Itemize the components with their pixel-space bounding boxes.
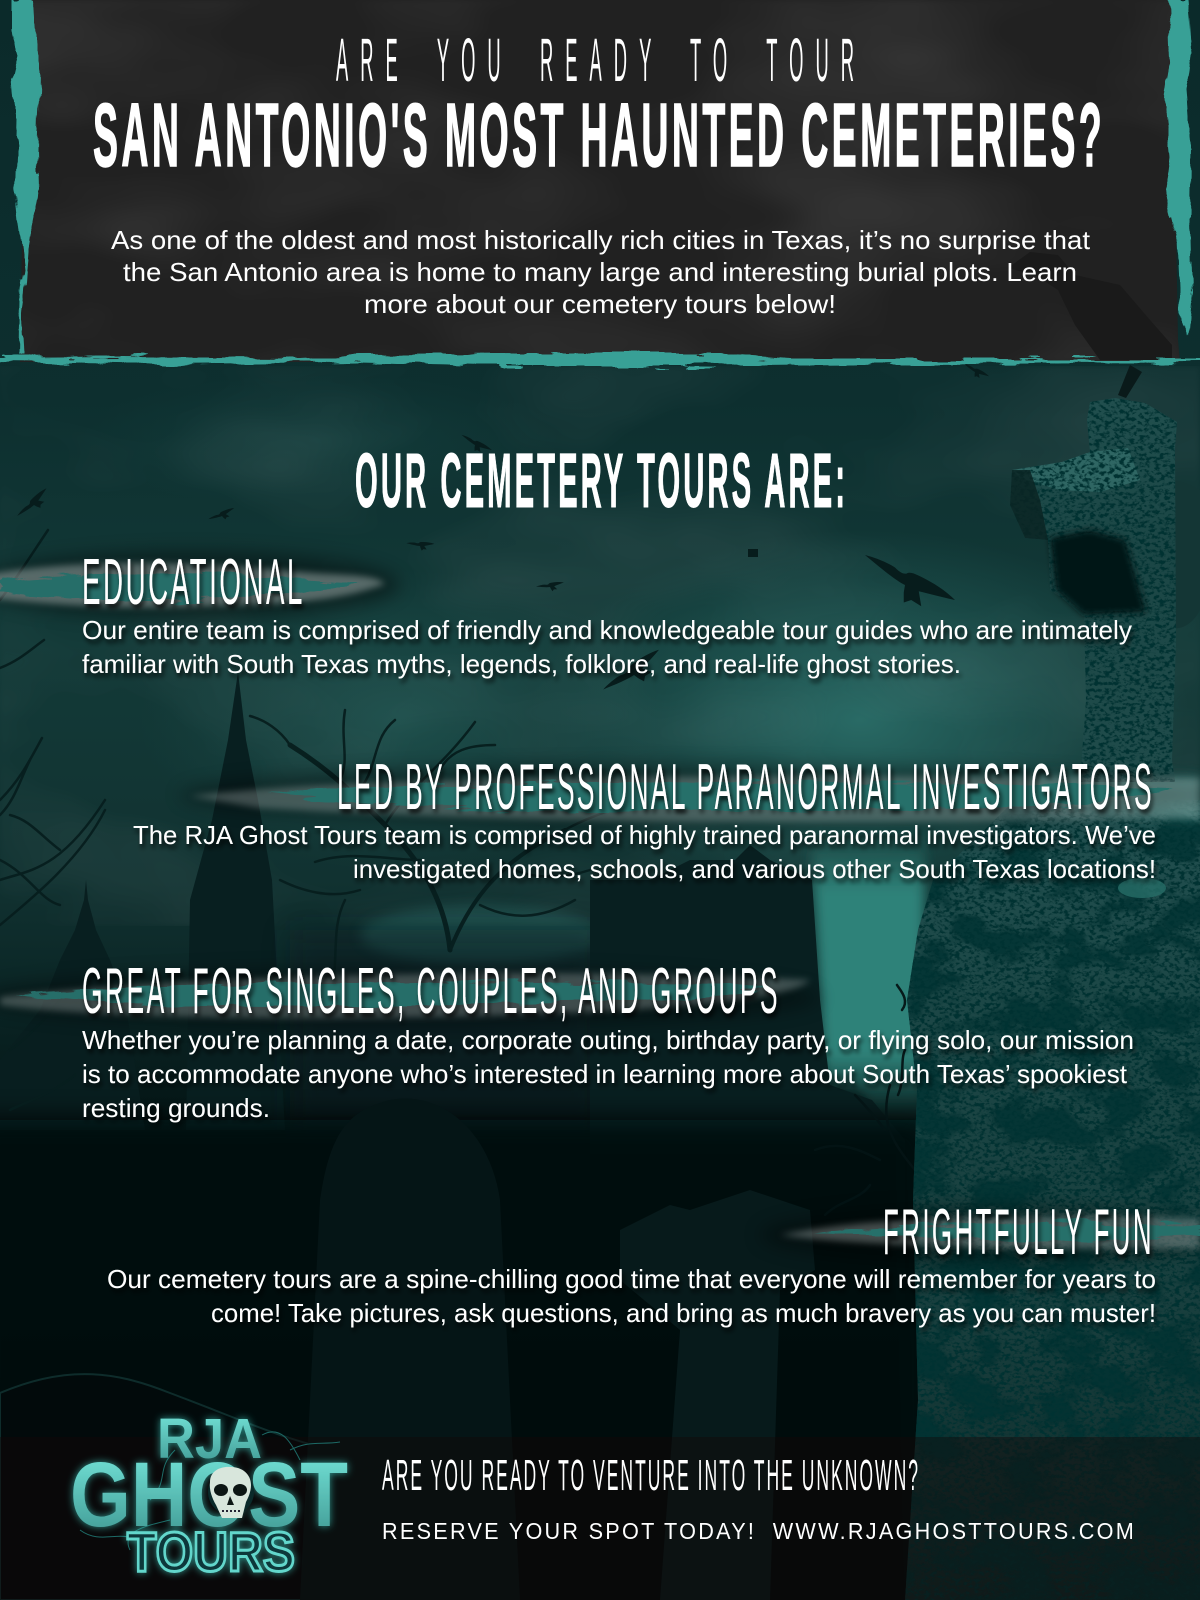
bare tree branches	[0, 530, 915, 1215]
teal brush edge left	[12, 0, 40, 352]
dark footer band	[0, 1437, 1200, 1600]
perched raven	[1008, 252, 1172, 360]
icon: skull	[208, 1467, 254, 1518]
foreground graves	[0, 1098, 815, 1600]
sky glow clouds	[0, 366, 1200, 926]
footer call to action	[382, 1451, 1136, 1544]
section: educational	[0, 545, 1132, 679]
cross arm shadow	[1050, 530, 1146, 615]
intro paragraph: the San Antonio area is home to many large and interesting burial plots. Learn	[123, 257, 1077, 287]
logo: RJA Ghost Tours: RJA	[157, 1407, 262, 1471]
educational body	[82, 615, 1132, 679]
section: great for singles, couples, and groups	[0, 954, 1134, 1123]
raven legs	[1118, 365, 1142, 398]
frightfully fun body	[107, 1264, 1156, 1328]
panel: dark header background	[20, 0, 1180, 362]
logo wisps	[80, 1432, 340, 1550]
logo: RJA Ghost Tours: GHOST	[70, 1444, 348, 1546]
great for singles body: is to accommodate anyone who’s interested in learning more about South Texas’ spookiest	[82, 1059, 1128, 1089]
logo: RJA Ghost Tours	[70, 1407, 348, 1583]
teal brush edge right	[1164, 0, 1192, 335]
stone cross	[1010, 398, 1200, 782]
footer reserve line: RESERVE YOUR SPOT TODAY! WWW.RJAGHOSTTOURS.COM	[382, 1518, 1136, 1544]
flying birds	[17, 336, 989, 706]
cross side shade	[1010, 470, 1048, 540]
cross arm top highlight	[1012, 448, 1140, 492]
smear behind great for singles	[0, 968, 820, 1028]
section: led by professional paranormal investigators	[133, 750, 1200, 884]
logo: RJA Ghost Tours: TOURS	[127, 1520, 295, 1583]
great for singles body	[82, 1025, 1134, 1123]
intro paragraph	[111, 225, 1091, 319]
led by body: investigated homes, schools, and various other South Texas locations!	[353, 854, 1156, 884]
frightfully fun body: Our cemetery tours are a spine-chilling good time that everyone will remember for years to	[107, 1264, 1156, 1294]
intro paragraph: more about our cemetery tours below!	[364, 289, 836, 319]
led by body	[133, 820, 1156, 884]
great for singles body: resting grounds.	[82, 1093, 270, 1123]
intro paragraph: As one of the oldest and most historically rich cities in Texas, it’s no surprise that	[111, 225, 1091, 255]
smear behind frightfully fun	[760, 1207, 1200, 1263]
led by body: The RJA Ghost Tours team is comprised of highly trained paranormal investigators. We’ve	[133, 820, 1156, 850]
moonlit gap behind church	[810, 830, 925, 1130]
church silhouettes	[0, 672, 905, 1300]
section: educational: EDUCATIONAL	[82, 545, 305, 618]
great for singles body: Whether you’re planning a date, corporate outing, birthday party, or flying solo, our mission	[82, 1025, 1134, 1055]
slab top highlight	[1015, 775, 1200, 820]
frightfully fun body: come! Take pictures, ask questions, and bring as much bravery as you can muster!	[211, 1298, 1156, 1328]
educational body: Our entire team is comprised of friendly and knowledgeable tour guides who are intimately	[82, 615, 1132, 645]
header panel	[0, 0, 1200, 398]
smear behind led by	[180, 765, 1200, 825]
section: frightfully fun	[107, 1195, 1200, 1328]
smear behind educational	[0, 551, 400, 619]
right gravestone	[905, 775, 1200, 1600]
foreground darkness	[0, 1120, 930, 1600]
educational body: familiar with South Texas myths, legends, folklore, and real-life ghost stories.	[82, 649, 961, 679]
teal brush edge bottom	[0, 354, 1200, 366]
